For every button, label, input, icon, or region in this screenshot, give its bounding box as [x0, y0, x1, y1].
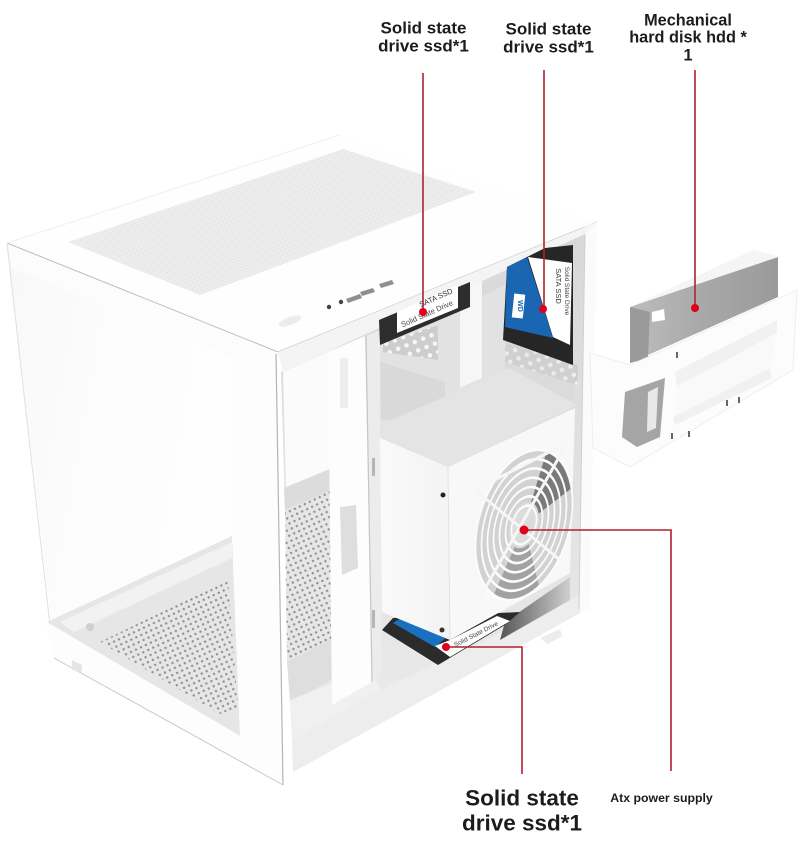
front I/O ports [277, 280, 394, 329]
label: power supply: Atx power supply [610, 791, 713, 805]
mounting bracket [590, 290, 797, 467]
top SSD [379, 282, 470, 345]
cage lower window [622, 378, 665, 447]
case interior [281, 232, 585, 772]
PC case [7, 135, 597, 785]
bottom SSD [382, 577, 570, 665]
bottom SSD: Solid State Drive [453, 620, 500, 649]
HDD cage bracket [590, 250, 797, 467]
right front post [278, 222, 597, 612]
rear SSD, WD Blue [503, 245, 573, 365]
line: rear SSD [539, 70, 547, 313]
label: hard disk: Mechanical [644, 12, 732, 30]
case foot [540, 629, 562, 644]
label: rear SSD: drive ssd*1 [503, 38, 594, 56]
power supply [380, 368, 577, 640]
line: top SSD [419, 73, 427, 316]
PSU side face [380, 438, 450, 640]
top mesh vent [68, 149, 476, 295]
rear SSD, WD Blue: WD BLUE [544, 279, 551, 310]
cage top rail [630, 250, 778, 311]
label: bottom SSD: Solid state [465, 786, 579, 810]
rear SSD, WD Blue: Solid State Drive [563, 267, 570, 316]
PSU fan face [448, 408, 575, 640]
line: hard disk [691, 70, 699, 312]
front lower frame [46, 352, 283, 785]
drive bay pillar [328, 330, 382, 705]
rear SSD, WD Blue: SATA SSD [554, 268, 563, 304]
label: hard disk: 1 [683, 46, 693, 64]
line: bottom SSD [442, 643, 522, 774]
PSU top face [380, 368, 577, 467]
label: top SSD: drive ssd*1 [378, 36, 469, 56]
top SSD: Solid State Drive [400, 298, 454, 329]
callout lines [419, 70, 699, 774]
left glass panel [7, 243, 283, 785]
top panel [7, 135, 597, 352]
label: bottom SSD: drive ssd*1 [462, 810, 582, 836]
cage metal face [630, 257, 778, 363]
top SSD: SATA SSD [418, 286, 455, 309]
label: hard disk: hard disk hdd * [629, 28, 747, 46]
case floor seen through glass [47, 536, 240, 736]
line: power supply [520, 526, 671, 771]
label: rear SSD: Solid state [506, 20, 591, 38]
label: top SSD: Solid state [381, 18, 466, 38]
fan and grille [475, 431, 572, 619]
rear SSD, WD Blue: WD [516, 300, 523, 312]
